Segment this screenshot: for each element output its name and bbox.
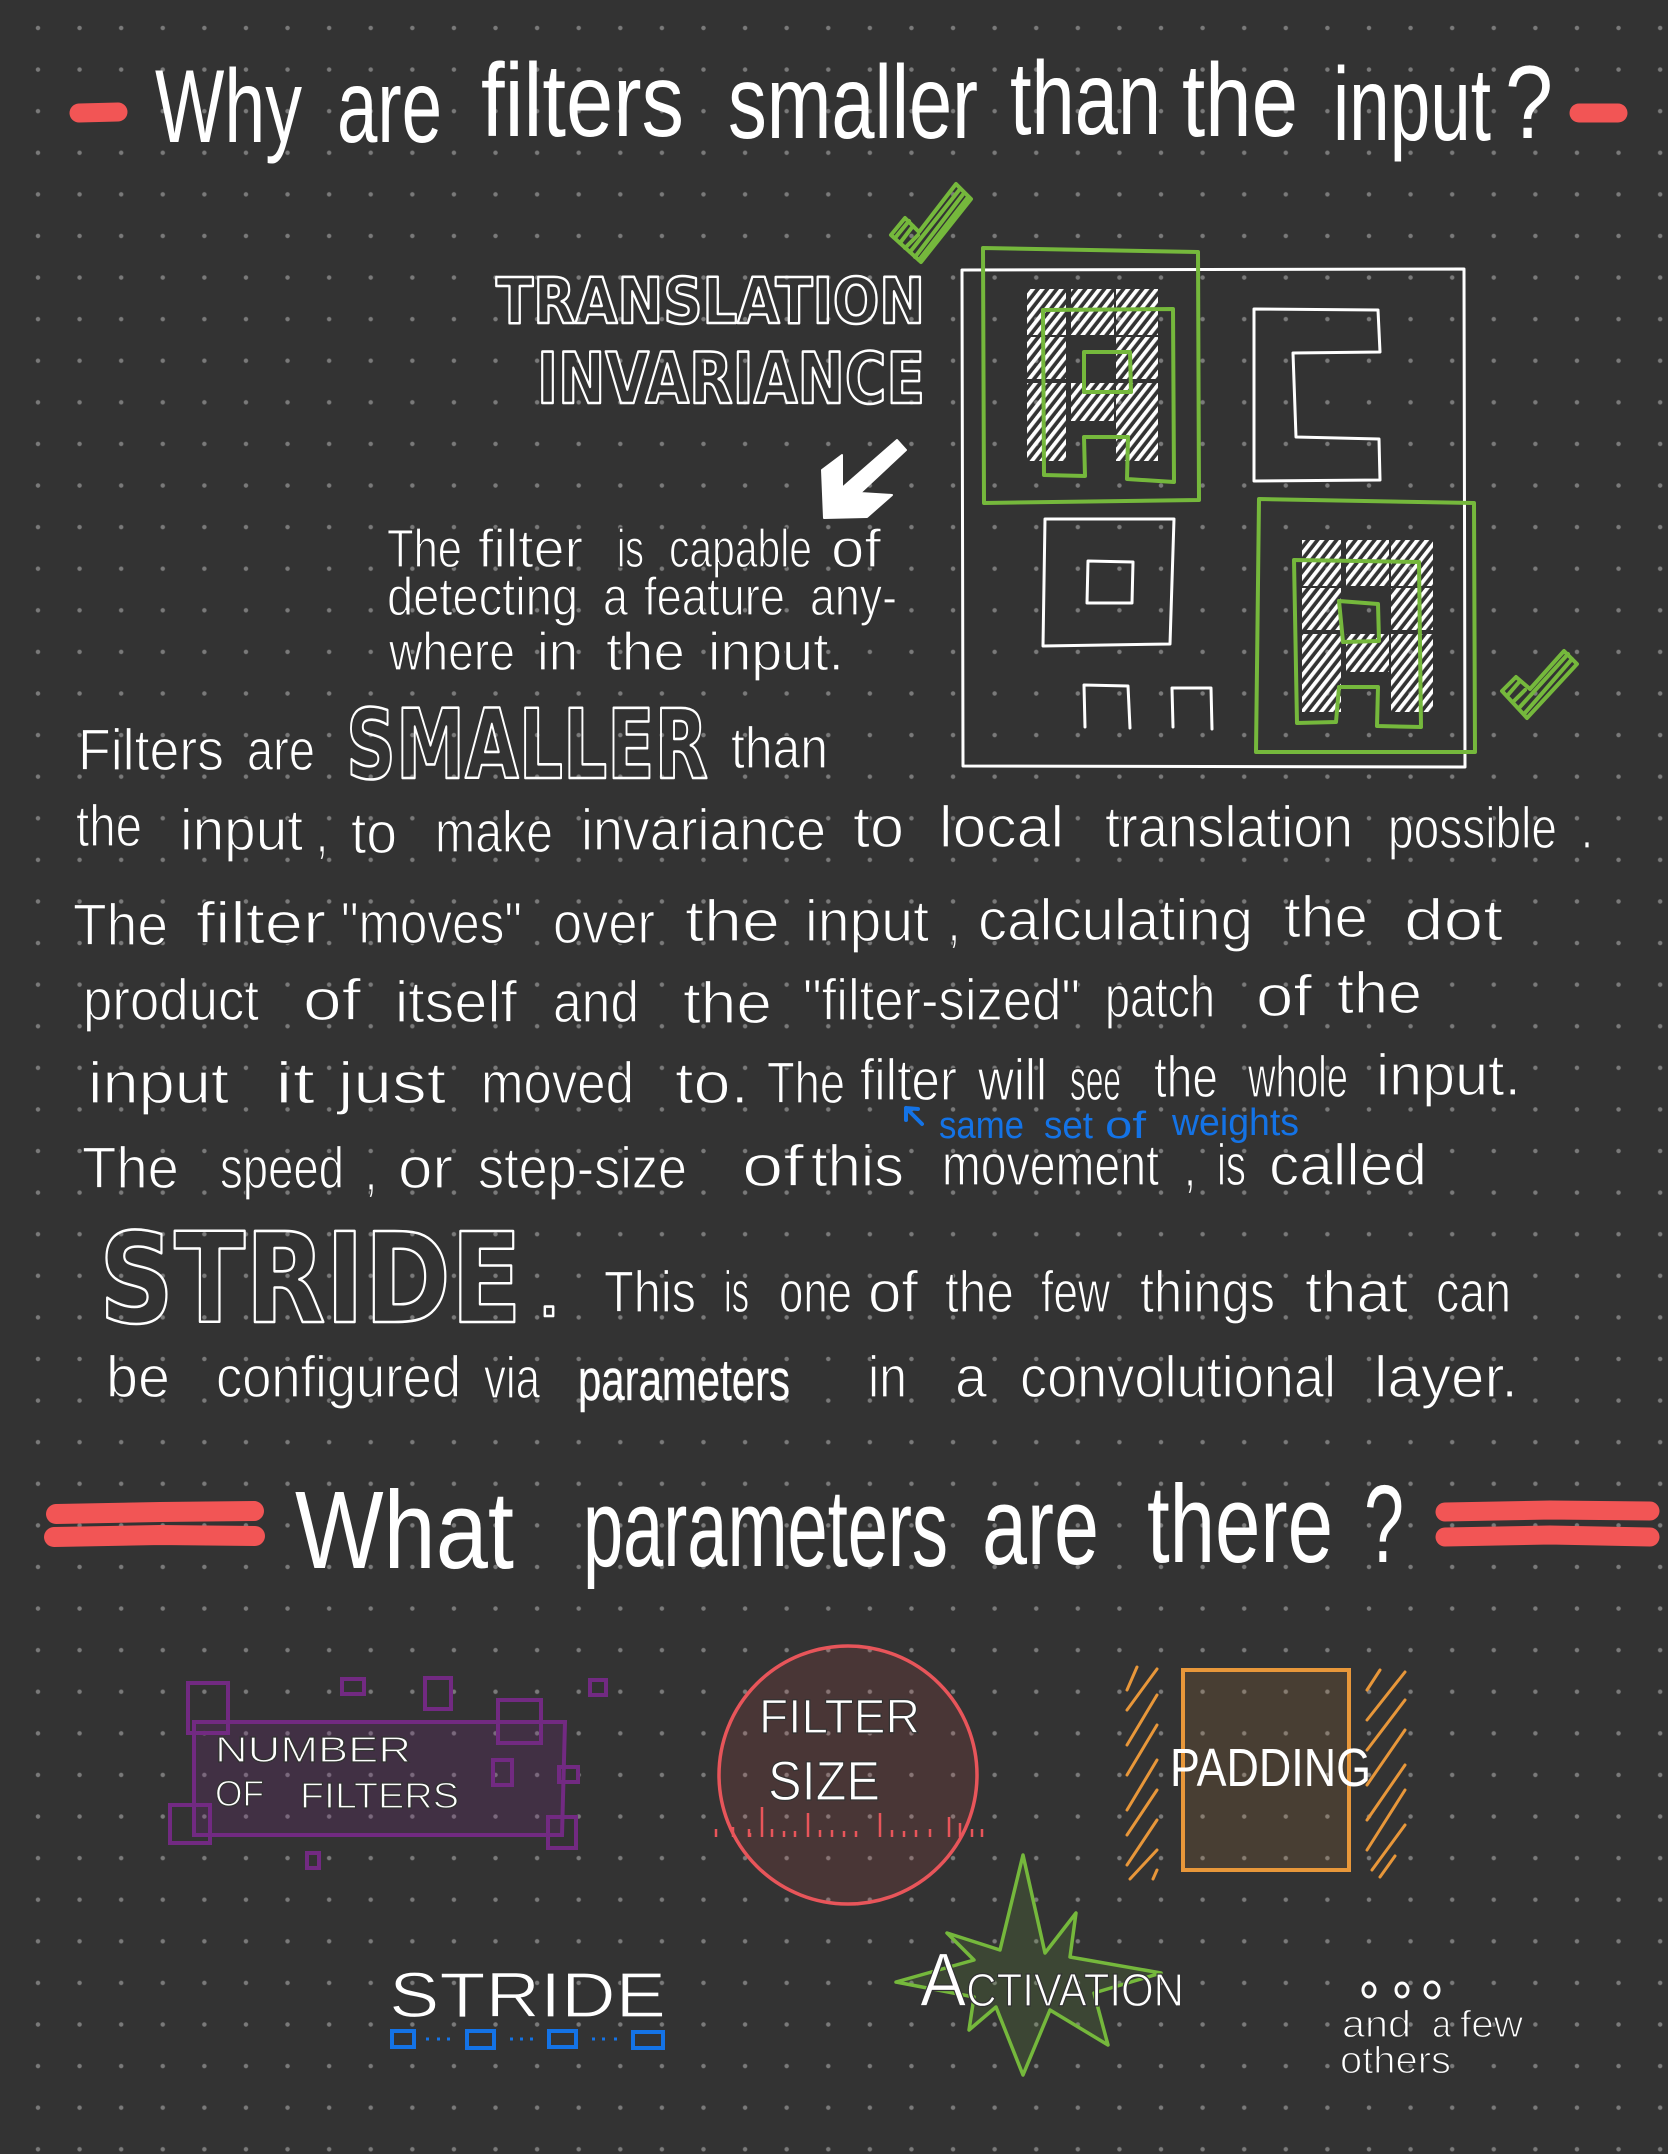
line: speed or step-size: movement xyxy=(942,1133,1159,1198)
line: the filter moves: the xyxy=(1284,885,1368,950)
label xyxy=(215,1729,459,1816)
title text: smaller xyxy=(728,45,978,161)
label: FILTER xyxy=(759,1691,920,1744)
line: filters are smaller than: than xyxy=(731,716,828,781)
heading text xyxy=(295,1463,1404,1592)
line: to make invariance: translation xyxy=(1105,795,1353,860)
line: configured via parameters xyxy=(106,1345,1518,1413)
line: speed or step-size: this xyxy=(811,1134,904,1199)
line: input it just moved to: filter xyxy=(860,1048,957,1113)
label: SIZE xyxy=(768,1749,880,1812)
letter A outline: bottom-right xyxy=(1294,560,1421,727)
line: stride emphasis: . xyxy=(540,1270,558,1328)
line: speed or step-size: , xyxy=(1184,1134,1196,1199)
line: configured via parameters: a xyxy=(955,1345,988,1410)
line: configured via parameters: parameters xyxy=(578,1348,790,1413)
text block: filter is capable of detecting a feature anywhere: The xyxy=(387,519,462,579)
label: STRIDE xyxy=(389,1959,666,2031)
line: the filter moves: filter xyxy=(196,891,326,956)
line: stride emphasis: can xyxy=(1436,1260,1511,1325)
line: stride emphasis: that xyxy=(1305,1260,1408,1325)
text block: filter is capable of detecting a feature anywhere: is xyxy=(617,519,644,579)
text block: filter is capable of detecting a feature anywhere: filter xyxy=(478,519,583,579)
note text: a xyxy=(1432,2004,1452,2046)
line: product of itself: and xyxy=(553,970,639,1035)
accent: left double red bars xyxy=(54,1511,255,1537)
line: the filter moves: the xyxy=(685,889,780,954)
text block: filter is capable of detecting a feature anywhere: the xyxy=(606,622,685,682)
icon: green check top xyxy=(891,184,971,262)
line: stride emphasis xyxy=(99,1207,1511,1352)
heading text: parameters xyxy=(583,1467,948,1590)
line: the filter moves: The xyxy=(73,893,168,958)
note text: others xyxy=(1340,2040,1451,2082)
note text: and xyxy=(1342,2004,1411,2046)
line: product of itself: "filter-sized" xyxy=(803,968,1080,1033)
line: product of itself: patch xyxy=(1105,965,1215,1030)
parameter: filter size xyxy=(716,1646,982,1904)
accent: right double red bars xyxy=(1445,1510,1650,1537)
scattered small filter squares xyxy=(170,1678,606,1868)
line: configured via parameters: configured xyxy=(216,1345,461,1410)
line: speed or step-size: is xyxy=(1217,1133,1246,1198)
blue step squares xyxy=(392,2031,663,2048)
parameter: number of filters xyxy=(170,1678,606,1868)
line: the filter moves: over xyxy=(553,891,655,956)
line: stride emphasis: This xyxy=(604,1260,696,1325)
title text: are xyxy=(337,49,442,165)
line: speed or step-size: , xyxy=(365,1138,377,1203)
annotation: same set of weights: of xyxy=(1105,1105,1147,1147)
line: the filter moves: "moves" xyxy=(341,891,522,956)
line: filters are smaller than xyxy=(78,689,828,801)
letter A outline: top-left xyxy=(1043,309,1174,482)
line: the filter moves: dot xyxy=(1404,888,1503,953)
line: input it just moved to xyxy=(88,1043,1521,1116)
text block: filter is capable of detecting a feature anywhere: a xyxy=(603,567,629,627)
line: stride emphasis: few xyxy=(1041,1260,1111,1325)
heading: translation invariance xyxy=(496,265,925,420)
note text: few xyxy=(1460,2004,1524,2046)
green star xyxy=(896,1855,1161,2075)
line: input it just moved to: the xyxy=(1154,1045,1218,1110)
text block: filter is capable of detecting a feature anywhere: feature xyxy=(644,567,785,627)
line: configured via parameters: layer. xyxy=(1374,1345,1518,1410)
line: the filter moves xyxy=(73,885,1503,958)
note text xyxy=(1340,2004,1524,2082)
text block: filter is capable of detecting a feature anywhere: in xyxy=(537,622,578,682)
line: to make invariance: local xyxy=(939,795,1064,860)
line: stride emphasis: things xyxy=(1140,1260,1275,1325)
line: input it just moved to: whole xyxy=(1247,1045,1348,1110)
hatching right xyxy=(1367,1670,1405,1877)
line: product of itself: of xyxy=(303,968,362,1033)
line: input it just moved to: will xyxy=(977,1048,1047,1113)
heading: translation invariance: INVARIANCE xyxy=(537,338,925,420)
line: input it just moved to: moved xyxy=(481,1051,634,1116)
line: to make invariance: , xyxy=(316,800,328,865)
line: input it just moved to: just xyxy=(336,1051,446,1116)
orange padded box xyxy=(1183,1670,1349,1870)
green filter box: bottom-right xyxy=(1256,499,1475,752)
line: input it just moved to: see xyxy=(1070,1048,1121,1113)
label: NUMBER xyxy=(215,1729,411,1770)
line: product of itself: product xyxy=(83,968,259,1033)
line: the filter moves: , xyxy=(948,889,960,954)
red circle xyxy=(719,1646,977,1904)
dotted steps xyxy=(426,2038,617,2040)
text block: filter is capable of detecting a feature anywhere: any- xyxy=(810,567,897,627)
line: to make invariance: invariance xyxy=(581,798,826,863)
line: to make invariance: to xyxy=(853,795,904,860)
note: and a few others xyxy=(1340,1982,1524,2082)
ruler ticks xyxy=(716,1807,982,1837)
line: the filter moves: input xyxy=(805,889,929,954)
line: filters are smaller than: Filters xyxy=(78,718,224,783)
icon: three dots xyxy=(1363,1982,1439,1998)
title text: input xyxy=(1333,47,1491,163)
line: speed or step-size: called xyxy=(1269,1133,1427,1198)
text block: filter is capable of detecting a feature anywhere: detecting xyxy=(387,567,578,627)
line: stride emphasis: STRIDE xyxy=(99,1207,522,1352)
heading text: are xyxy=(982,1465,1099,1588)
title text: the xyxy=(1182,43,1298,159)
line: configured via parameters: convolutional xyxy=(1020,1345,1336,1410)
paragraph: filters are smaller and stride xyxy=(73,689,1593,1413)
line: filters are smaller than: are xyxy=(247,718,315,783)
icon: white arrow pointing to the explanation xyxy=(822,440,906,518)
line: configured via parameters: via xyxy=(484,1346,541,1411)
line: configured via parameters: in xyxy=(868,1345,907,1410)
heading: translation invariance: TRANSLATION xyxy=(496,265,925,338)
title: why are filters smaller than the input xyxy=(79,41,1618,165)
parameter: stride xyxy=(389,1959,666,2048)
label xyxy=(759,1691,920,1812)
green filter box: top-left xyxy=(983,248,1199,503)
annotation: same set of weights: same xyxy=(939,1105,1024,1147)
purple filter panel xyxy=(194,1722,565,1835)
letter O xyxy=(1043,519,1174,646)
line: product of itself xyxy=(83,961,1422,1036)
icon: blue annotation arrow xyxy=(906,1108,922,1124)
line: input it just moved to: The xyxy=(767,1051,845,1116)
line: the filter moves: calculating xyxy=(978,888,1253,953)
annotation: same set of weights: weights xyxy=(1171,1102,1299,1144)
line: stride emphasis: one xyxy=(779,1260,852,1325)
diagram: input image with filters detecting the letter A xyxy=(891,184,1577,767)
line: stride emphasis: of xyxy=(868,1260,919,1325)
line: input it just moved to: input. xyxy=(1376,1043,1521,1108)
heading text: there xyxy=(1147,1463,1333,1586)
line: product of itself: the xyxy=(683,971,772,1036)
line: product of itself: of xyxy=(1256,964,1313,1029)
line: speed or step-size: The xyxy=(82,1136,179,1201)
parameter: padding xyxy=(1127,1667,1405,1879)
line: speed or step-size xyxy=(82,1133,1427,1203)
title text xyxy=(155,41,1553,165)
section heading: what parameters are there xyxy=(54,1463,1650,1592)
line: filters are smaller than: SMALLER xyxy=(346,689,708,801)
line: to make invariance: the xyxy=(76,794,142,859)
label: OF xyxy=(215,1773,264,1814)
title text: filters xyxy=(481,43,684,159)
line: speed or step-size: step-size xyxy=(478,1136,687,1201)
title text: than xyxy=(1010,41,1161,157)
hatched feature: bottom-right filter xyxy=(1302,540,1433,712)
line: speed or step-size: or xyxy=(398,1136,453,1201)
line: configured via parameters: be xyxy=(106,1345,170,1410)
line: to make invariance: possible xyxy=(1388,796,1557,861)
title accent: right red dash xyxy=(1579,104,1618,122)
heading text: ? xyxy=(1364,1463,1404,1586)
hatched feature: top-left filter xyxy=(1027,289,1158,461)
text block: filter is capable of detecting a feature anywhere: input. xyxy=(708,622,844,682)
annotation: same set of weights: set xyxy=(1044,1105,1093,1147)
line: stride emphasis: is xyxy=(724,1260,749,1325)
line: product of itself: the xyxy=(1337,961,1422,1026)
line: stride emphasis: the xyxy=(945,1260,1014,1325)
text block: filter is capable of detecting a feature anywhere xyxy=(387,519,897,682)
label: ACTIVATION xyxy=(920,1938,1184,2023)
line: input it just moved to: input xyxy=(88,1051,229,1116)
parameter: activation xyxy=(896,1855,1184,2075)
line: to make invariance: to xyxy=(351,801,397,866)
title text: ? xyxy=(1505,45,1553,161)
text block: filter is capable of detecting a feature anywhere: of xyxy=(831,519,882,579)
small open shapes xyxy=(1084,685,1212,729)
line: to make invariance: make xyxy=(435,800,553,865)
line: speed or step-size: speed xyxy=(220,1136,344,1201)
text block: filter is capable of detecting a feature anywhere: capable xyxy=(669,519,812,579)
icon: green check bottom xyxy=(1502,651,1577,718)
annotation: same set of weights xyxy=(906,1102,1299,1147)
line: product of itself: itself xyxy=(395,970,518,1035)
hatching left xyxy=(1127,1667,1157,1879)
title text: Why xyxy=(155,49,302,165)
label: FILTERS xyxy=(300,1775,459,1816)
title accent: left red dash xyxy=(79,112,118,113)
line: to make invariance xyxy=(76,794,1593,866)
heading text: What xyxy=(295,1469,514,1592)
letter C xyxy=(1254,309,1380,481)
line: speed or step-size: of xyxy=(742,1134,805,1199)
label: PADDING xyxy=(1170,1738,1371,1798)
line: input it just moved to: it xyxy=(275,1051,315,1116)
line: to make invariance: . xyxy=(1581,796,1593,861)
input frame xyxy=(962,269,1465,767)
line: to make invariance: input xyxy=(180,798,303,863)
text block: filter is capable of detecting a feature anywhere: where xyxy=(388,622,515,682)
line: input it just moved to: to. xyxy=(675,1051,749,1116)
